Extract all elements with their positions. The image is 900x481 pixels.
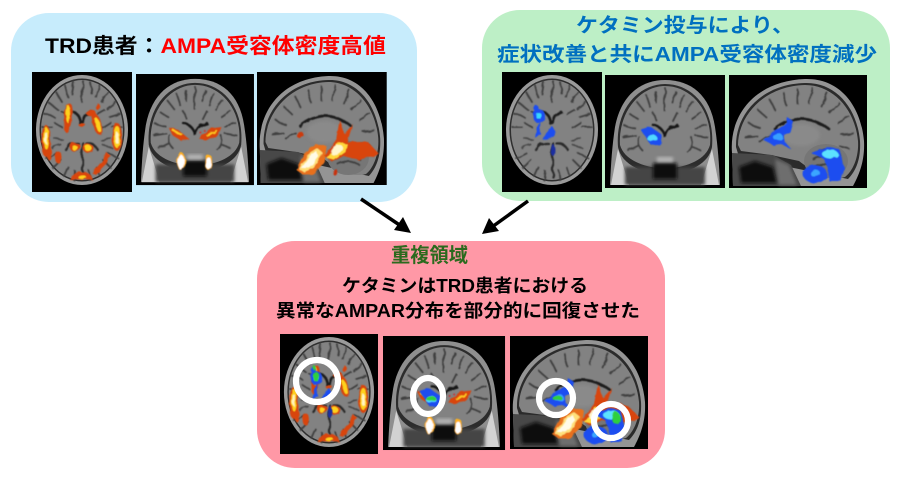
brain scan: coronal, increased density bbox=[136, 74, 254, 185]
brain scan: axial, increased density bbox=[32, 72, 132, 192]
text: conclusion: 異常なAMPAR分布を部分的に回復させた bbox=[276, 301, 640, 321]
heading: TRD patients high AMPA density: TRD患者： AMPA受容体密度高値 bbox=[45, 35, 386, 58]
brain scan: sagittal, increased density bbox=[257, 72, 387, 185]
panel: overlap region bbox=[257, 241, 665, 468]
heading: overlap region: 重複領域 bbox=[391, 244, 468, 267]
panel: ketamine effect bbox=[482, 10, 890, 201]
heading: ketamine reduces AMPA density: 症状改善と共にAMPA受容体密度減少 bbox=[497, 42, 877, 66]
heading: ketamine reduces AMPA density bbox=[497, 14, 877, 66]
brain scan: sagittal, decreased density bbox=[729, 75, 867, 188]
text: conclusion: ケタミンはTRD患者における bbox=[342, 276, 588, 296]
highlight circles on overlap regions bbox=[296, 360, 628, 438]
brain scan: sagittal, overlap bbox=[510, 336, 648, 449]
text: conclusion bbox=[276, 276, 640, 321]
brain scan: coronal, decreased density bbox=[605, 75, 725, 188]
brain scan: axial, overlap bbox=[280, 334, 378, 454]
arrow: from ketamine panel to overlap panel bbox=[482, 201, 528, 234]
arrow: from TRD panel to overlap panel bbox=[361, 199, 411, 233]
panel: TRD patients bbox=[11, 13, 417, 202]
brain scan: axial, decreased density bbox=[502, 72, 602, 192]
heading: ketamine reduces AMPA density: ケタミン投与により、 bbox=[576, 14, 794, 37]
brain scan: coronal, overlap bbox=[383, 336, 505, 450]
